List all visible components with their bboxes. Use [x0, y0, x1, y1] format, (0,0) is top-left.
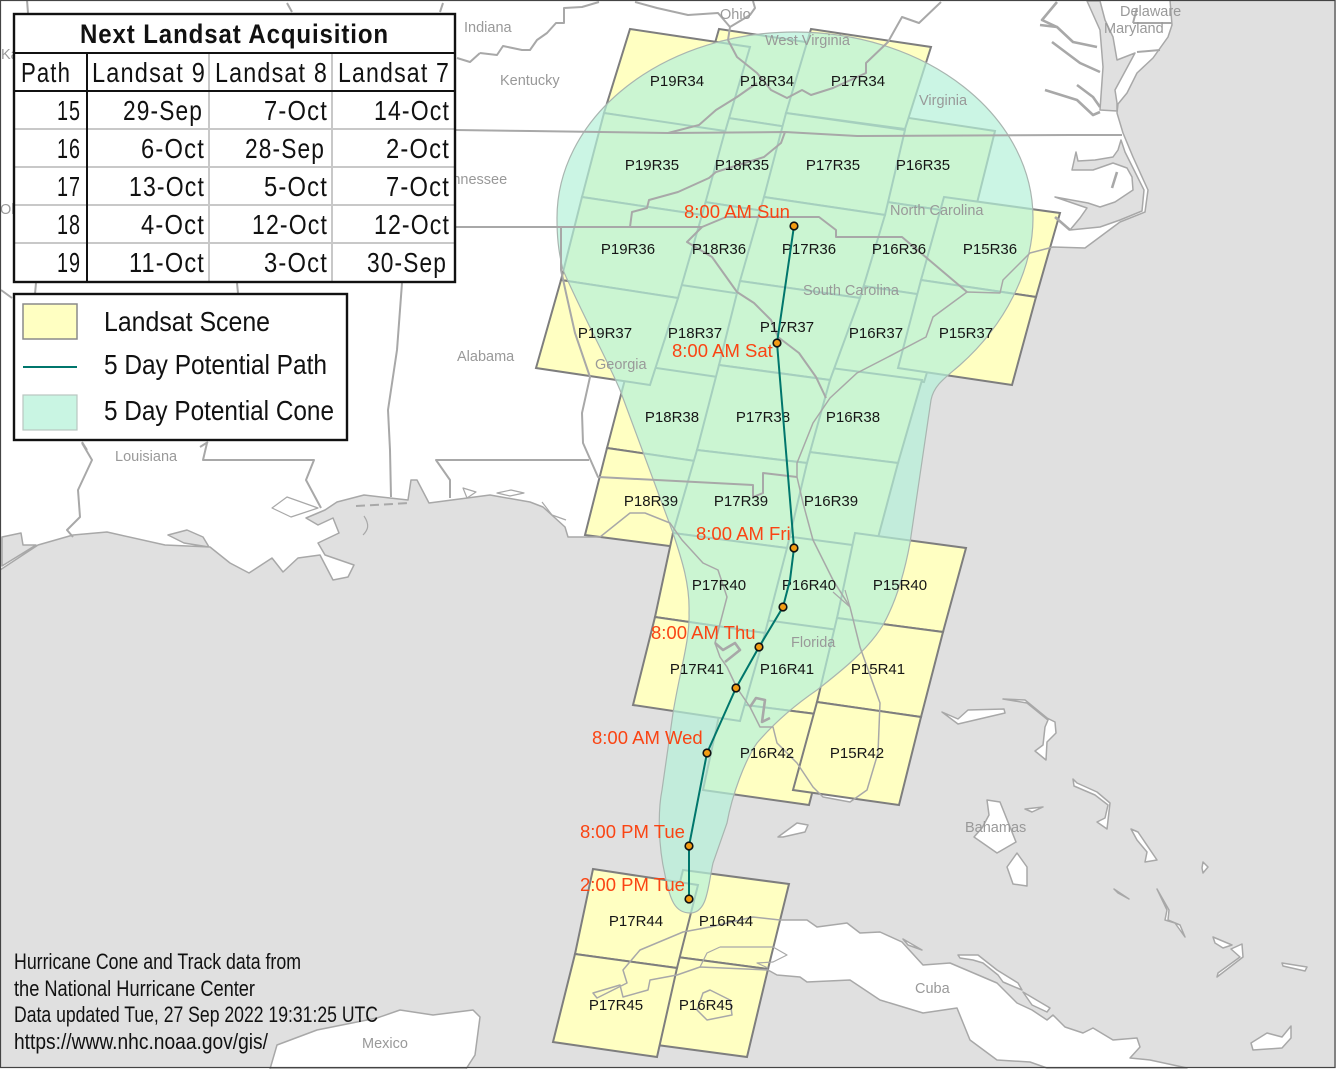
table header row: Landsat 8 [215, 57, 328, 88]
table data rows: 6-Oct [141, 133, 205, 164]
state and country labels: Georgia [595, 357, 648, 373]
data source note [14, 949, 378, 1054]
forecast time labels: 8:00 AM Sat [672, 340, 773, 361]
state and country labels: Alabama [457, 349, 515, 365]
forecast time labels: 8:00 PM Tue [580, 821, 685, 842]
table data rows: 30-Sep [367, 247, 447, 278]
scene labels: P15R40 [873, 577, 927, 594]
table data rows: 5-Oct [264, 171, 328, 202]
scene labels: P16R45 [679, 997, 733, 1014]
state and country labels: Florida [791, 635, 836, 651]
legend label: potential path: 5 Day Potential Path [104, 349, 327, 380]
table data rows: 2-Oct [386, 133, 450, 164]
scene labels: P16R40 [782, 577, 836, 594]
table data rows: 12-Oct [252, 209, 328, 240]
table header row: Landsat 9 [92, 57, 206, 88]
5 day potential path [689, 226, 794, 899]
table data rows: 29-Sep [123, 95, 203, 126]
scene labels: P17R37 [760, 319, 814, 336]
table data rows [57, 95, 450, 278]
scene labels: P19R37 [578, 325, 632, 342]
state and country labels: Virginia [919, 93, 968, 109]
state and country labels: Delaware [1120, 4, 1181, 20]
table data rows: 11-Oct [129, 247, 205, 278]
state and country labels: Maryland [1104, 21, 1164, 37]
forecast time labels: 8:00 AM Fri [696, 523, 791, 544]
scene labels: P18R34 [740, 73, 794, 90]
table header row [21, 57, 450, 88]
forecast time labels: 8:00 AM Wed [592, 727, 703, 748]
state and country labels: Cuba [915, 981, 951, 997]
scene labels: P17R41 [670, 661, 724, 678]
data source note: Hurricane Cone and Track data from [14, 949, 301, 974]
scene labels: P17R38 [736, 409, 790, 426]
state and country labels: Louisiana [115, 449, 178, 465]
scene labels: P19R34 [650, 73, 704, 90]
scene labels: P15R36 [963, 241, 1017, 258]
table data rows: 7-Oct [386, 171, 450, 202]
legend swatch: potential cone [23, 395, 77, 430]
legend swatch: potential path [23, 366, 77, 368]
state and country labels: South Carolina [803, 283, 900, 299]
legend [14, 294, 347, 440]
state and country labels: Ohio [720, 7, 751, 23]
table title: Next Landsat Acquisition [80, 19, 389, 49]
scene labels: P18R35 [715, 157, 769, 174]
table data rows: 4-Oct [141, 209, 205, 240]
scene labels: P15R41 [851, 661, 905, 678]
state borders and estuaries [1, 0, 1172, 537]
state and country labels: Indiana [464, 20, 513, 36]
table data rows: 13-Oct [129, 171, 205, 202]
table data rows: 15 [57, 95, 81, 126]
Landsat scene footprints [536, 29, 1060, 1057]
legend swatch: Landsat scene [23, 304, 77, 339]
scene labels: P17R39 [714, 493, 768, 510]
state and country labels: Kentucky [500, 73, 560, 89]
scene labels: P16R37 [849, 325, 903, 342]
scene labels: P18R39 [624, 493, 678, 510]
data source note: the National Hurricane Center [14, 976, 255, 1001]
5 day potential cone [557, 32, 1033, 913]
scene labels: P19R36 [601, 241, 655, 258]
table data rows: 12-Oct [374, 209, 450, 240]
table data rows: 7-Oct [264, 95, 328, 126]
scene labels: P17R34 [831, 73, 885, 90]
forecast position markers [685, 222, 798, 903]
table data rows: 19 [57, 247, 81, 278]
state and country labels: Oklahoma [0, 202, 67, 218]
scene labels: P17R35 [806, 157, 860, 174]
scene labels: P15R42 [830, 745, 884, 762]
data source note: https://www.nhc.noaa.gov/gis/ [14, 1029, 269, 1054]
forecast time labels: 8:00 AM Thu [651, 622, 756, 643]
state and country labels: North Carolina [890, 203, 984, 219]
state and country labels: Mississippi [276, 356, 346, 372]
scene labels: P16R38 [826, 409, 880, 426]
state and country labels: Kansas [1, 47, 49, 63]
state and country labels: West Virginia [765, 33, 851, 49]
forecast time labels: 2:00 PM Tue [580, 874, 685, 895]
table header row: Landsat 7 [338, 57, 450, 88]
legend label: potential cone: 5 Day Potential Cone [104, 395, 334, 426]
scene labels: P17R44 [609, 913, 663, 930]
scene labels: P16R42 [740, 745, 794, 762]
scene labels: P17R45 [589, 997, 643, 1014]
table data rows: 28-Sep [245, 133, 325, 164]
scene labels: P18R36 [692, 241, 746, 258]
table data rows: 18 [57, 209, 81, 240]
table: next Landsat acquisition [14, 14, 455, 282]
table header row: Path [21, 57, 71, 88]
table data rows: 17 [57, 171, 81, 202]
legend label: Landsat scene: Landsat Scene [104, 306, 270, 337]
table data rows: 16 [57, 133, 81, 164]
scene labels [578, 73, 1017, 1014]
scene labels: P17R36 [782, 241, 836, 258]
scene labels: P17R40 [692, 577, 746, 594]
scene labels: P18R38 [645, 409, 699, 426]
state and country labels: Mexico [362, 1036, 408, 1052]
scene labels: P16R36 [872, 241, 926, 258]
scene labels: P16R39 [804, 493, 858, 510]
scene labels: P15R37 [939, 325, 993, 342]
state and country labels: Bahamas [965, 820, 1026, 836]
data source note: Data updated Tue, 27 Sep 2022 19:31:25 UTC [14, 1002, 378, 1027]
table data rows: 14-Oct [374, 95, 450, 126]
scene labels: P18R37 [668, 325, 722, 342]
scene labels: P16R44 [699, 913, 753, 930]
scene labels: P16R35 [896, 157, 950, 174]
scene labels: P16R41 [760, 661, 814, 678]
forecast time labels: 8:00 AM Sun [684, 201, 790, 222]
forecast time labels [580, 201, 791, 895]
state and country labels: Tennessee [437, 172, 507, 188]
table data rows: 3-Oct [264, 247, 328, 278]
scene labels: P19R35 [625, 157, 679, 174]
